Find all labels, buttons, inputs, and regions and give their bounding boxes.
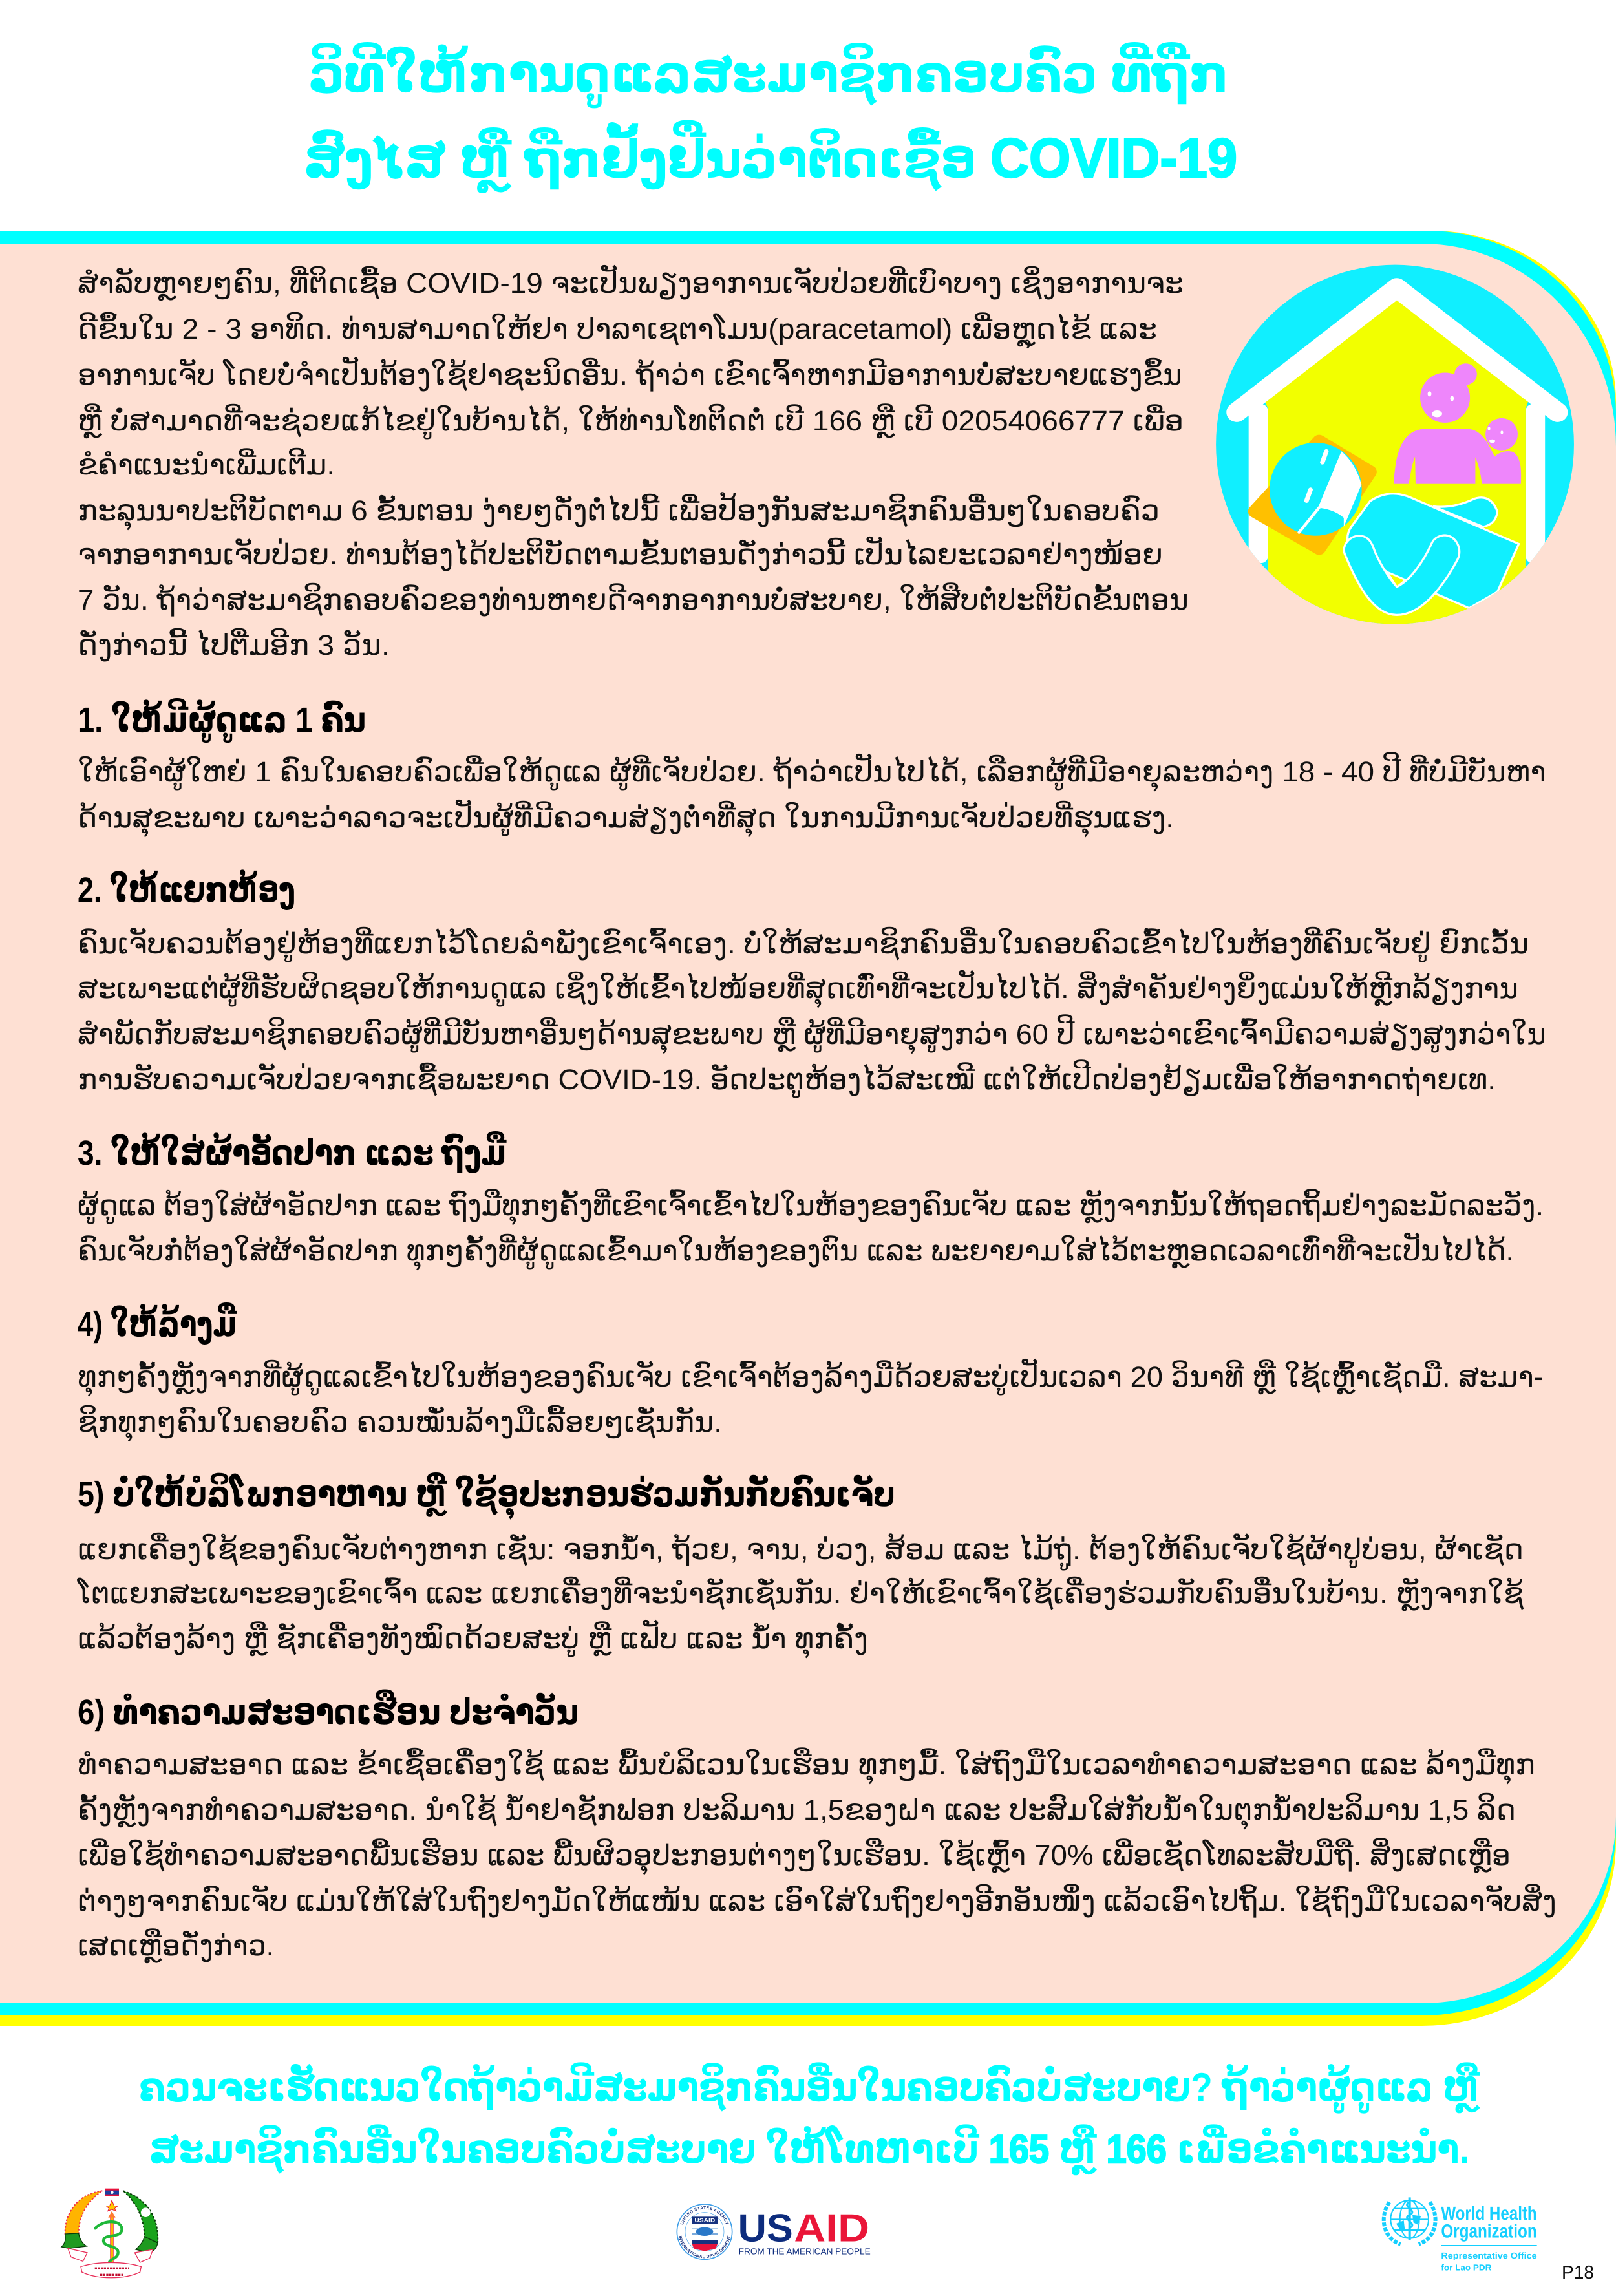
- icon: caregiver and patient at home: [1212, 261, 1579, 629]
- logo: USAID: FROM THE AMERICAN PEOPLE: [739, 2247, 871, 2256]
- section 5: [77, 1472, 1524, 1659]
- text block: introduction: ຂໍຄຳແນະນຳເພີ່ມເຕີມ.: [78, 448, 335, 481]
- panel: main content background: [0, 231, 1616, 2026]
- section 2: ການຮັບຄວາມເຈັບປ່ວຍຈາກເຊື້ອພະຍາດ COVID-19. ອັດປະຕູຫ້ອງໄວ້ສະເໝີ ແຕ່ໃຫ້ເປີດປ່ອງຢ້ຽມເພື່ອໃຫ້ອາກາດຖ່າຍເທ.: [78, 1059, 1496, 1098]
- section 1: ດ້ານສຸຂະພາບ ເພາະວ່າລາວຈະເປັນຜູ້ທີ່ມີຄວາມສ່ຽງຕ່ຳທີ່ສຸດ ໃນການມີການເຈັບປ່ວຍທີ່ຮຸນແຮງ.: [78, 799, 1174, 838]
- text block: introduction: ສຳລັບຫຼາຍໆຄົນ, ທີ່ຕິດເຊື້ອ COVID-19 ຈະເປັນພຽງອາການເຈັບປ່ວຍທີ່ເບົາບາງ ເຊິ່ງອາການຈະ: [78, 264, 1184, 301]
- section 6: ເພື່ອໃຊ້ທຳຄວາມສະອາດພື້ນເຮືອນ ແລະ ພື້ນຜິວອຸປະກອນຕ່າງໆໃນເຮືອນ. ໃຊ້ເຫຼົ້າ 70% ເພື່ອເຊັດໂທລະສັບມືຖື. ສິ່ງເສດເຫຼືອ: [78, 1838, 1511, 1875]
- section 4: ຊິກທຸກໆຄົນໃນຄອບຄົວ ຄວນໝັ່ນລ້າງມືເລື້ອຍໆເຊັ່ນກັນ.: [78, 1405, 722, 1442]
- section 5: ແລ້ວຕ້ອງລ້າງ ຫຼື ຊັກເຄື່ອງທັງໝົດດ້ວຍສະບູ່ ຫຼື ແຟັບ ແລະ ນ້ຳ ທຸກຄັ້ງ: [78, 1620, 868, 1659]
- section 2: 2. ໃຫ້ແຍກຫ້ອງ: [78, 869, 295, 910]
- section 1: ໃຫ້ເອົາຜູ້ໃຫຍ່ 1 ຄົນໃນຄອບຄົວເພື່ອໃຫ້ດູແລ ຜູ້ທີ່ເຈັບປ່ວຍ. ຖ້າວ່າເປັນໄປໄດ້, ເລືອກຜູ້ທີ່ມີອາຍຸລະຫວ່າງ 18 - 40 ປີ ທີ່ບໍ່ມີບັນຫາ: [78, 752, 1546, 792]
- text block: introduction: [78, 264, 1189, 662]
- text block: introduction: ດີຂຶ້ນໃນ 2 - 3 ອາທິດ. ທ່ານສາມາດໃຫ້ຢາ ປາລາເຊຕາໂມນ(paracetamol) ເພື່ອຫຼຸດໄຂ້ ແລະ: [78, 312, 1157, 349]
- text block: introduction: ກະລຸນນາປະຕິບັດຕາມ 6 ຂັ້ນຕອນ ງ່າຍໆດັ່ງຕໍ່ໄປນີ້ ເພື່ອປ້ອງກັນສະມາຊິກຄົນອື່ນໆໃນຄອບຄົວ: [78, 491, 1160, 531]
- page number: P18: [1562, 2262, 1594, 2283]
- text block: introduction: 7 ວັນ. ຖ້າວ່າສະມາຊິກຄອບຄົວຂອງທ່ານຫາຍດີຈາກອາການບໍ່ສະບາຍ, ໃຫ້ສືບຕໍ່ປະຕິບັດຂັ້ນຕອນ: [78, 582, 1189, 617]
- logo: USAID: US: [738, 2206, 793, 2249]
- logo: Lao Ministry of Health emblem: [61, 2189, 158, 2278]
- logo: USAID: UNITED STATES AGENCY: [680, 2206, 729, 2225]
- section 6: ທຳຄວາມສະອາດ ແລະ ຂ້າເຊື້ອເຄື່ອງໃຊ້ ແລະ ພື້ນບໍລິເວນໃນເຮືອນ ທຸກໆມື້. ໃສ່ຖົງມືໃນເວລາທຳຄວາມສະອາດ ແລະ ລ້າງມືທຸກ: [78, 1747, 1535, 1785]
- section 6: [78, 1690, 1557, 1964]
- section 6: ຕ່າງໆຈາກຄົນເຈັບ ແມ່ນໃຫ້ໃສ່ໃນຖົງຢາງມັດໃຫ້ແໜ້ນ ແລະ ເອົາໃສ່ໃນຖົງຢາງອີກອັນໜຶ່ງ ແລ້ວເອົາໄປຖິ້ມ. ໃຊ້ຖົງມືໃນເວລາຈັບສິ່ງ: [78, 1884, 1557, 1918]
- section 5: ແຍກເຄື່ອງໃຊ້ຂອງຄົນເຈັບຕ່າງຫາກ ເຊັ່ນ: ຈອກນ້ຳ, ຖ້ວຍ, ຈານ, ບ່ວງ, ສ້ອມ ແລະ ໄມ້ຖູ່. ຕ້ອງໃຫ້ຄົນເຈັບໃຊ້ຜ້າປູບ່ອນ, ຜ້າເຊັດ: [78, 1533, 1524, 1571]
- section 6: ເສດເຫຼືອດັ່ງກ່າວ.: [78, 1928, 274, 1964]
- logo: World Health Organization: [1384, 2197, 1537, 2273]
- logo: USAID: [676, 2204, 871, 2260]
- logo: World Health Organization: for Lao PDR: [1441, 2263, 1491, 2273]
- logo: USAID: AID: [794, 2206, 869, 2249]
- section 5: 5) ບໍ່ໃຫ້ບໍລິໂພກອາຫານ ຫຼື ໃຊ້ອຸປະກອນຮ່ວມກັນກັບຄົນເຈັບ: [78, 1472, 895, 1520]
- section 6: ຄັ້ງຫຼັງຈາກທຳຄວາມສະອາດ. ນຳໃຊ້ ນ້ຳຢາຊັກຟອກ ປະລິມານ 1,5ຂອງຝາ ແລະ ປະສົມໃສ່ກັບນ້ຳໃນຕຸກນ້ຳປະລິມານ 1,5 ລິດ: [78, 1792, 1516, 1830]
- footer callout: [139, 2062, 1480, 2176]
- section 2: ສຳພັດກັບສະມາຊິກຄອບຄົວຜູ້ທີ່ມີບັນຫາອື່ນໆດ້ານສຸຂະພາບ ຫຼື ຜູ້ທີ່ມີອາຍຸສູງກວ່າ 60 ປີ ເພາະວ່າເຂົາເຈົ້າມີຄວາມສ່ຽງສູງກວ່າໃນ: [78, 1014, 1546, 1054]
- section 3: [78, 1131, 1544, 1271]
- title: ສົງໄສ ຫຼື ຖືກຢັ້ງຢືນວ່າຕິດເຊື້ອ COVID-19: [304, 120, 1237, 193]
- section 4: [78, 1302, 1544, 1442]
- section 2: ສະເພາະແຕ່ຜູ້ທີ່ຮັບຜິດຊອບໃຫ້ການດູແລ ເຊິ່ງໃຫ້ເຂົ້າໄປໜ້ອຍທີ່ສຸດເທົ່າທີ່ຈະເປັນໄປໄດ້. ສິ່ງສຳຄັນຢ່າງຍິ່ງແມ່ນໃຫ້ຫຼີກລ້ຽງການ: [78, 970, 1518, 1008]
- title: [304, 42, 1237, 193]
- section 2: [78, 869, 1546, 1098]
- section 6: 6) ທຳຄວາມສະອາດເຮືອນ ປະຈຳວັນ: [78, 1690, 579, 1732]
- logo: USAID: INTERNATIONAL DEVELOPMENT: [679, 2235, 730, 2259]
- footer callout: ສະມາຊິກຄົນອື່ນໃນຄອບຄົວບໍ່ສະບາຍ ໃຫ້ໂທຫາເບີ 165 ຫຼື 166 ເພື່ອຂໍຄຳແນະນຳ.: [149, 2124, 1469, 2176]
- section 1: [78, 698, 1546, 838]
- logo: World Health Organization: Organization: [1441, 2220, 1537, 2242]
- section 3: ຜູ້ດູແລ ຕ້ອງໃສ່ຜ້າອັດປາກ ແລະ ຖົງມືທຸກໆຄັ້ງທີ່ເຂົາເຈົ້າເຂົ້າໄປໃນຫ້ອງຂອງຄົນເຈັບ ແລະ ຫຼັງຈາກນັ້ນໃຫ້ຖອດຖິ້ມຢ່າງລະມັດລະວັງ.: [78, 1189, 1544, 1226]
- logo: World Health Organization: World Health: [1441, 2202, 1537, 2224]
- section 3: 3. ໃຫ້ໃສ່ຜ້າອັດປາກ ແລະ ຖົງມື: [78, 1131, 507, 1173]
- text block: introduction: ຈາກອາການເຈັບປ່ວຍ. ທ່ານຕ້ອງໄດ້ປະຕິບັດຕາມຂັ້ນຕອນດັ່ງກ່າວນີ້ ເປັນໄລຍະເວລາຢ່າງໜ້ອຍ: [78, 536, 1163, 571]
- section 4: 4) ໃຫ້ລ້າງມື: [78, 1302, 237, 1345]
- section 4: ທຸກໆຄັ້ງຫຼັງຈາກທີ່ຜູ້ດູແລເຂົ້າໄປໃນຫ້ອງຂອງຄົນເຈັບ ເຂົາເຈົ້າຕ້ອງລ້າງມືດ້ວຍສະບູ່ເປັນເວລາ 20 ວິນາທີ ຫຼື ໃຊ້ເຫຼົ້າເຊັດມື. ສະມາ-: [78, 1358, 1544, 1397]
- section 1: 1. ໃຫ້ມີຜູ້ດູແລ 1 ຄົນ: [78, 698, 366, 743]
- text block: introduction: ດັ່ງກ່າວນີ້ ໄປຕື່ມອີກ 3 ວັນ.: [78, 628, 390, 662]
- logo: World Health Organization: Representative Office: [1441, 2251, 1537, 2260]
- section 3: ຄົນເຈັບກໍ່ຕ້ອງໃສ່ຜ້າອັດປາກ ທຸກໆຄັ້ງທີ່ຜູ້ດູແລເຂົ້າມາໃນຫ້ອງຂອງຕົນ ແລະ ພະຍາຍາມໃສ່ໄວ້ຕະຫຼອດເວລາເທົ່າທີ່ຈະເປັນໄປໄດ້.: [78, 1232, 1514, 1271]
- section 2: ຄົນເຈັບຄວນຕ້ອງຢູ່ຫ້ອງທີ່ແຍກໄວ້ໂດຍລຳພັງເຂົາເຈົ້າເອງ. ບໍ່ໃຫ້ສະມາຊິກຄົນອື່ນໃນຄອບຄົວເຂົ້າໄປໃນຫ້ອງທີ່ຄົນເຈັບຢູ່ ຍົກເວັ້ນ: [78, 927, 1529, 962]
- text block: introduction: ຫຼື ບໍ່ສາມາດທີ່ຈະຊ່ວຍແກ້ໄຂຢູ່ໃນບ້ານໄດ້, ໃຫ້ທ່ານໂທຕິດຕໍ່ ເບີ 166 ຫຼື ເບີ 02054066777 ເພື່ອ: [78, 403, 1184, 440]
- section 5: ໂຕແຍກສະເພາະຂອງເຂົາເຈົ້າ ແລະ ແຍກເຄື່ອງທີ່ຈະນຳຊັກເຊັ່ນກັນ. ຢ່າໃຫ້ເຂົາເຈົ້າໃຊ້ເຄື່ອງຮ່ວມກັບຄົນອື່ນໃນບ້ານ. ຫຼັງຈາກໃຊ້: [77, 1577, 1524, 1611]
- text block: introduction: ອາການເຈັບ ໂດຍບໍ່ຈຳເປັນຕ້ອງໃຊ້ຢາຊະນິດອື່ນ. ຖ້າວ່າ ເຂົາເຈົ້າຫາກມີອາການບໍ່ສະບາຍແຮງຂຶ້ນ: [78, 356, 1182, 392]
- logo: USAID: USAID: [694, 2218, 715, 2224]
- footer callout: ຄວນຈະເຮັດແນວໃດຖ້າວ່າມີສະມາຊິກຄົນອື່ນໃນຄອບຄົວບໍ່ສະບາຍ? ຖ້າວ່າຜູ້ດູແລ ຫຼື: [139, 2062, 1480, 2114]
- title: ວິທີໃຫ້ການດູແລສະມາຊິກຄອບຄົວ ທີ່ຖືກ: [309, 42, 1229, 109]
